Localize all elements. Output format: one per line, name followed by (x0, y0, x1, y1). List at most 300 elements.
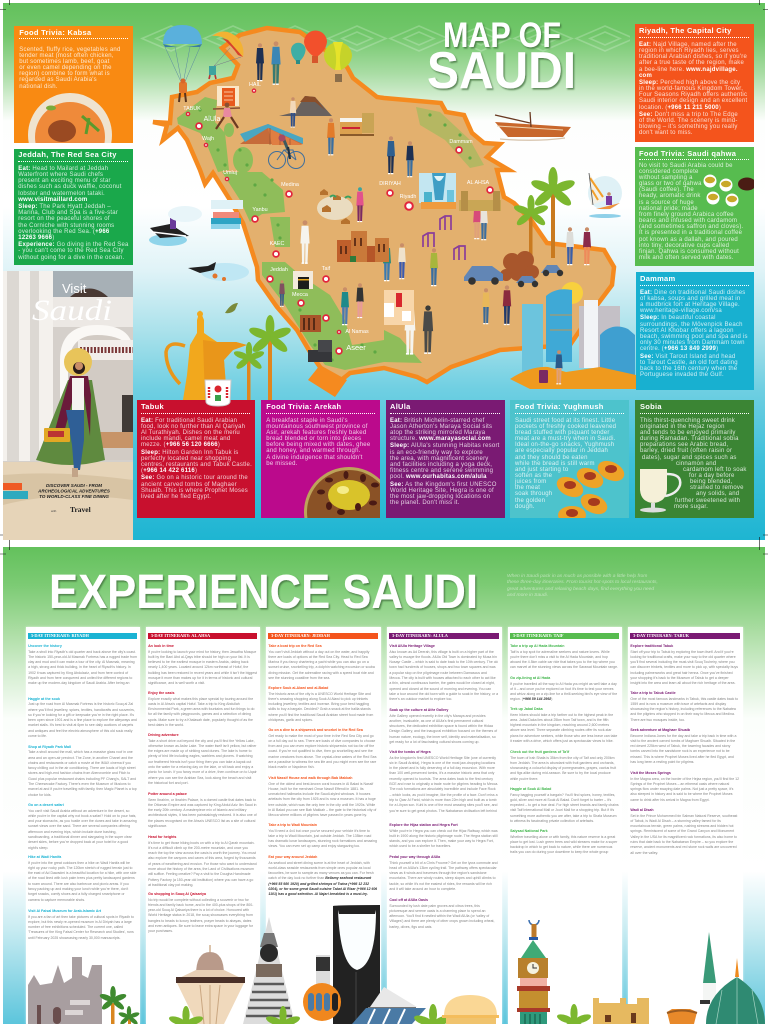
text: Tabuk tips: Eat: For traditional Saudi Arabian (141, 418, 237, 424)
text: Sobia description (640, 418, 747, 510)
bar: Taif (510, 633, 619, 639)
item: desert safari: Go on a desert safari (28, 803, 64, 807)
text: Kabsa description (19, 46, 120, 90)
icon: yoga woman (213, 103, 240, 129)
text: Riyadh tips: in the world-famous Kingdom Tower, (639, 86, 743, 92)
photo panel: Visit Saudi advert: Saudi (32, 294, 112, 327)
text: intro: these three-day itineraries. From tourist hot-spots to local restaurants, (507, 580, 658, 585)
column: Riyadh itinerary (26, 627, 140, 1024)
icon: Mud tower (300, 315, 321, 332)
text: Jeddah tips: Experience: Go diving in the Red Sea (18, 242, 129, 248)
text: qahwa description: beans and infused with cardamom (639, 218, 737, 224)
text: Arekah description: be missed. (266, 461, 298, 467)
icon: palms by the coast (233, 315, 292, 402)
item: trek: Trek up Jabal Daka (510, 707, 543, 711)
text: Riyadh tips: traditional Arabian dishes, so if you're (639, 54, 747, 60)
text: qahwa description: into tiny, decorative cups called (639, 243, 729, 249)
text: qahwa description: (Saudi coffee). The (639, 187, 694, 193)
text: Arekah description: Asir, arekah features freshly baked (266, 430, 366, 436)
text: Riyadh tips: Eat: Najd Village, named after the (639, 42, 737, 48)
item: Wadi mountain: Take a trip to Wadi Mountain (268, 823, 317, 827)
city labels: AlUla (204, 116, 220, 123)
text: Jeddah tips: lobster and watermelon tataki. (18, 191, 105, 197)
text: Riyadh tips: Four Seasons Riyadh offers authentic (639, 92, 747, 98)
heading: Tabuk: Tabuk (141, 402, 164, 411)
item: look: An look in time (148, 644, 174, 648)
bar: Tabuk: 3-DAY ITINERARY: TABUK (633, 633, 689, 638)
text: qahwa description: milk and often served with dates. (639, 255, 734, 261)
city labels: DIRIYAH (379, 181, 401, 187)
city labels: Medina (281, 182, 299, 188)
item: museum: If you are a fan of art then take pictures of cultural spots in Riyadh to explore, but this newly re-opened museum in Al Diriyah has a large number of free exhibitions scheduled. The current one, called 'Treasures of the King Faisal Center for Research and Studies', runs until February 2025 showcasing nearly 30,000 manuscripts. (28, 915, 134, 940)
text: Kabsa description: region) combine to form what is (19, 71, 110, 77)
item: Wadi mountain: You'll need a 4x4 but once you've secured your vehicle it's time to take a trip to Wadi Mountain, just outside Jeddah. The 135km road has dramatic lunar landscapes, stunning rock formations and amazing views. You can even set up camp and enjoy stargazing too. (268, 829, 377, 848)
text: Sobia description: more sugar. (674, 504, 708, 510)
heading: Yughmush: Food Trivia: Yughmush (515, 402, 604, 411)
text: AlUla tips: Jason Atherton's Maraya Social sits (390, 424, 492, 430)
text: Yughmush description: and they should be eaten (515, 455, 588, 461)
item: heights: It's time to get those hiking boots on with a trip to Al Qarah mountain. It's not a difficult climb up the 200-metre mountain, and once you reach the top the view across the oasis is worth the journey. You must also explore the canyons and caves of this area, forged by thousands of years of weathering and erosion. For those who want to understand more about the history of the area, the Land of Civilisations museum will suffice. Feeling creative? Pay a visit to the Dougha Handmade Pottery Factory (a 150-year old institution) where you can have a go at traditional clay pot making. (148, 841, 257, 887)
text: Riyadh tips: don't want to miss. (639, 130, 693, 136)
bar: Riyadh (28, 633, 137, 639)
text: qahwa description (639, 162, 743, 261)
text: Jeddah tips: without going for a dive in the ocean. (18, 255, 124, 261)
item: palace: Potter around a palace (148, 792, 187, 796)
text: Yughmush description: bread stuffed with piquant tender (515, 430, 610, 436)
item: oasis: Explore exactly what makes this place special by touring around the oasis in Al Ahsa's capital Hofuf. Take a trip to King Abdullah Environmental Park, a green area with fountains and fun things to do for all the family with playgrounds, games and a selection of dining spots. Make sure to try a Khalasah date, popularly thought of as the best dates in the world. (148, 697, 255, 727)
text: Yughmush description: soften as the (515, 473, 552, 479)
text: Dammam tips: Sleep: In beautiful coastal (640, 315, 716, 321)
text: Arekah description (266, 418, 370, 467)
item: Wadi Disah: Wadi al Disah (630, 808, 654, 812)
text: intro: and more in Saudi. (507, 593, 548, 598)
item: fruit gardens: The town of Irah Shafa is 35km from the city of Taif and only 200km from Jeddah. The area is abundant with fruit gardens and orchards, showcasing a colourful display of pomegranates, grapes, cactus fruit and figs alike during mid-season. Be sure to try the local produce while you're there. (510, 756, 616, 781)
text: Sobia description: preparations see Arabic bread, (640, 442, 728, 448)
item: adventure: Become Indiana Jones for the day and take a trip back in time with a visit to the ancient carved tombs of Maghaer Shuaib. Situated in the red desert 225km west of Tabuk, the towering facades and stony tombs carved into the sandstone rock is an experience not to be missed. This is where Prophet Moses lived after he fled Egypt, and has long been a resting point for pilgrims. (630, 734, 736, 764)
vegetation (177, 97, 484, 370)
text: Dammam tips: beach, swimming pool and spa and is (640, 334, 748, 340)
skyline: tent and stadium (352, 987, 453, 1024)
icon: shops (384, 290, 414, 325)
photo panel: Visit Saudi advert: Travel (70, 505, 91, 514)
item: traditional Tabuk: Explore traditional Tabuk (630, 644, 673, 648)
icon: red gate (217, 86, 239, 106)
text: Yughmush description: Saudi street food at its finest. Little (515, 418, 615, 424)
bar: AlUla: 3-DAY ITINERARY: ALULA (392, 633, 448, 638)
icon: coffee cups and dates (704, 174, 754, 206)
city labels: HAIL (249, 82, 261, 88)
icon: black fort (308, 340, 332, 362)
item: trek: Keen hikers should take a trip farther out to the highest peak in the area. Jabal Daka lies about 25km from Taif town, and is the fifth highest mountain in the kingdom, reaching around 2,600 metres above sea level. Three separate climbing routes offer its rock-star plans for adventure seekers, while those who are less brave can take it easier with a drive, which offers just as spectacular views to hike. (510, 713, 617, 743)
text: intro: When in Saudi pack in as much as possible with a little help from (507, 574, 647, 579)
photo panel: Visit Saudi advert: ARCHEOLOGICAL ADVENTURES (37, 488, 110, 494)
text: Yughmush description: the golden (515, 498, 545, 504)
text: qahwa description: heady, aromatic drink (639, 193, 701, 199)
text: Riyadh tips: a bee-line here. www.najdvillage. (639, 67, 738, 73)
item: Moses springs (630, 771, 739, 808)
text: AlUla tips: is an eco-friendly way to explore (390, 450, 483, 456)
skyline: green dome mosque (700, 932, 765, 1024)
text: intro (507, 574, 658, 598)
text: AlUla tips: structure. www.marayasocial.com (390, 436, 491, 442)
text: intro: great adventures and relaxing beach days, find everything you need (507, 587, 654, 592)
text: Kabsa description: national dish. (19, 84, 58, 90)
text: qahwa description: without sampling a (639, 175, 693, 181)
icon: rock formation (279, 96, 332, 116)
text: Sobia description: cardamom left to soak (683, 467, 747, 473)
photo panel: Visit Saudi advert: DISCOVER SAUDI - FROM (46, 483, 102, 488)
item: mall: Take a stroll around the mall, which has a massive glass roof in one area and an open-air precinct. The Zone, in another Chanel and the chains and restaurants or catch a movie at the IMAX cinema if you fancy chilling out in the air conditioning. There are loads of high street stores and high-end fashion chains from Abercrombie and Fitch to Gucci plus popular restaurant chains including PF Chang's, SALT and The Cheesecake Factory. There's even the Museum of Illusions to marvel at and if you're travelling with family, then Magic Planet is a top choice for kids. (28, 750, 137, 797)
city labels: Wajh (202, 136, 214, 142)
text: qahwa description: No visit to Saudi Arabia could be (639, 163, 733, 169)
text: Jeddah tips: the Corniche with stunning rooms (18, 223, 114, 229)
item: mall: Shop at Riyadh Park Mall (28, 745, 71, 749)
text: AlUla tips: See: As the Kingdom's first UNESCO (390, 482, 497, 488)
text: AlUla tips: the area, with magnificent scenery (390, 456, 489, 462)
text: Tabuk tips: mezze. (+966 56 120 6666) (141, 442, 220, 448)
text: Jeddah tips: Marina, Club and Spa is a five-star (18, 210, 118, 216)
panel: Riyadh (635, 24, 754, 142)
text: Dammam tips: surroundings, the Mövenpick Beach (640, 322, 743, 328)
text: AlUla tips: Sleep: AlUla's stunning Habitas resort (390, 443, 500, 449)
city labels: Al Namas (345, 329, 369, 335)
item: shopping: No trip would be complete without collecting a souvenir or two for friends and family back home, and in the 400-plus shops of the 800-year-old Souq Al Qaisariya there is a lot of choice. Honoured with World Heritage status in 2018, the souq showcases everything from bangles to beads to luxury leathers, prayer beads to abayas, dates and even antiques. Be sure to leave extra space in your luggage for your purchases. (148, 898, 253, 933)
text: Tabuk tips (141, 418, 252, 500)
bar: Al Ahsa (148, 633, 257, 639)
photo panel: Visit Saudi advert (3, 271, 133, 540)
item: zip lining: Go zip-lining at Al Hada (510, 676, 550, 680)
text: Dammam tips: only 30 minutes from Dammam town (640, 340, 745, 346)
text: AlUla tips: pool. www.ourhabitas.com/alula (390, 474, 487, 480)
icon: Dammam skyline and dunes (510, 282, 636, 389)
text: Dammam tips: Eat: Dine on traditional Saudi dishes (640, 290, 746, 296)
panel: Tabuk (137, 400, 255, 518)
text: Dammam tips: See: Visit Tarout Island and head (640, 354, 735, 360)
icons: off-road vehicles (464, 265, 563, 287)
item: boat: You can't visit Jeddah without a day out on the water, and happily there are loads of options at the Red Sea City. Head to Red Sea Marina if you fancy chartering a yacht while you can also go on a sunset cruise, snorkelling trip, a dolphin watching excursion or scuba diving mission. Get the adrenaline racing with a speed boat ride and see the stunning coastline from the sea. (268, 650, 375, 680)
item: castle: One of the most famous landmarks in Tabuk, this castle dates back to 1559 and is now a museum with trace of artefacts and display showcasing the region's history, including references to the Nabatea and the pilgrims who stopped in on their way to Mecca and Medina. There are two mosques inside, too. (630, 697, 738, 722)
text: Arekah description: A divine indulgence that shouldn't (266, 455, 363, 461)
text: Tabuk tips: Al Turathiyah. Dishes on the menu (141, 430, 240, 436)
item: desert safari: You can't visit Saudi Arabia without an adventure in the desert, so while you're in the capital why not book a safari? Hold on to your hats, and your stomachs, as you hustle over the dunes and take in amazing sunset views over the sand. There are several companies offering afternoon and evening trips, which include dune bashing, sandboarding, a traditional dinner and stargazing in the super clear desert skies, before you're dropped back at your hotel for a good night's sleep. (28, 809, 137, 850)
icon: east coast palms (513, 167, 576, 260)
item: souk: Haggle at Souk Al Balad (510, 787, 551, 791)
item: zip lining: If you've travelled all the way to Al Hada you might as well take a day of it – and once you've explored on foot it's time to test your nerves and whizz along on a zip-line for a thrill-seeking bird's eye view of the region. (+966 59 144 2992) (510, 682, 617, 701)
icons: purple camels (423, 216, 465, 260)
text: Yughmush description (514, 418, 616, 510)
icons: travellers on the map (256, 41, 591, 355)
text: AlUla tips (390, 418, 500, 506)
text: Tabuk tips: include mandi, camel meat and (141, 436, 230, 442)
item: eat: As seafood and street dining scene is at the heart of Jeddah, with world-class seaside restaurants from simple ones popular as local favourites, be sure to sample as many venues as you can. For fresh catch of the day look no further than Bellamy seafood restaurant (+966 55 980 1920) and grilled shrimps of Twina (+966 12 232 0204), or for some great Saudi cuisine Tabat Al Rizar (+966 12 606 1101) has a good selection. Al Najari breakfast is a must-try. (268, 861, 377, 896)
text: Dammam tips (640, 290, 748, 378)
item: castle: Take a trip to Tabuk Castle (630, 691, 676, 695)
text: Yughmush description: juices from (515, 479, 546, 485)
text: Sobia description: barley, dried fruit (often raisin or (640, 448, 732, 454)
text: Riyadh tips: blowing – it's something you really (639, 124, 738, 130)
item: Al Hada: Take a trip up Al Hada Mountain (510, 644, 564, 648)
item: Nassif: Visit Nassif House and walk through Bab Makkah (268, 776, 352, 780)
item: traditional Tabuk: Start off your trip to Tabuk by exploring the town itself. And if you're looking for traditional crafts, make your way to the old quarter where you'll find several including the must-visit Souq Touheiry, where you can discover trinkets, textiles and more to pick up, with specialty buys including palmerworks and great hair henna. Once you've finished your shopping it's back to the Museum of Tabuk to get a deeper insight into the area and learn all about the rich heritage of the area. (630, 650, 738, 685)
text: Tabuk tips: Shuaib. This is where Prophet Moses (141, 488, 248, 494)
column: Tabuk itinerary (628, 627, 742, 1024)
text: Tabuk tips: See: Go on a historic tour around the (141, 475, 248, 481)
title: Map of Saudi: SAUDI (427, 42, 576, 100)
city labels: Mecca (292, 292, 308, 298)
text: Yughmush description: the meat (515, 485, 540, 491)
icon: Riyadh towers (419, 173, 456, 209)
icon: Al Ahsa fort (459, 191, 501, 211)
item: cycling: Pedal your way through AlUla (389, 855, 440, 859)
item: cycling: Think yourself a bit of a Chris Froome? Get on the lycra commute and head off on AlUla's 13km cycling trail. The pathway offers spectacular views as it winds and traverses through the region's sandstone mountains. There are windy routes, steep slopes and uphill climbs to tackle, so while it's not the easiest of rides, the rewards will be rich and it will take around an hour to complete. (389, 861, 498, 891)
item: eat: Eat your way around Jeddah (268, 855, 317, 859)
text: Arekah description: mountainous southwest province of (266, 424, 368, 430)
text: Dammam tips: Resort Al Khobar offers a lagoon (640, 328, 734, 334)
column: Jeddah itinerary (266, 627, 380, 1024)
heading: Kabsa: Food Trivia: Kabsa (19, 28, 91, 37)
icon: hot air balloons (291, 30, 352, 82)
icon: dallah coffee pot (166, 310, 247, 400)
photo panel: Visit Saudi advert: TO WORLD-CLASS FINE DINING (39, 494, 109, 499)
text: Yughmush description: dough. (515, 504, 535, 510)
text: Sobia description: and tends to be enjoyed primarily (640, 430, 736, 436)
icon: paraglider (209, 31, 243, 79)
text: Yughmush description: pockets of freshly cooked leavened (515, 424, 616, 430)
text: Jeddah tips: www.visitmaillard.com (18, 197, 87, 203)
text: Tabuk tips: lived after he fled Egypt. (141, 494, 211, 500)
item: Athr gallery: Athr Gallery opened recently in the city's Maraya and provides another, invaluable, as one of AlUla's first permanent cultural structures, the dedicated exhibition space is found within the Hidaa Design Gallery, and the inaugural exhibition focused on the themes of human nature, ecology, the inner self, identity and materialisation, so get ready for a lot of fascinating cultural shows coming up. (389, 714, 497, 744)
icon: dhow ship (495, 112, 571, 140)
column: Al Ahsa itinerary (146, 627, 260, 1024)
text: Riyadh tips: location. (+966 11 211 5000) (639, 105, 721, 111)
text: Jeddah tips (18, 166, 129, 261)
text: Sobia description: further sweetened with (675, 498, 740, 504)
heading: Riyadh: Riyadh, The Capital City (639, 26, 732, 35)
text: AlUla tips: World Heritage Site, Hegra is one of (390, 488, 494, 494)
icon: fish (225, 303, 238, 313)
city labels: Umluj (223, 170, 237, 176)
city labels: KAEC (270, 241, 284, 247)
text: Sobia description: for a day before (689, 473, 735, 479)
text: Dammam tips: Portuguese invaded the Gulf. (640, 372, 724, 378)
item: hike: If you're into the great outdoors then a hike on Wadi Hanifa will be right up your rocky path. The 120km stretch of rugged terrain just to the east of Ad Dawadmi is a beautiful location for a hike, with one side of the road lined with lush palm trees plus pretty landscaped gardens to roam around. There are also barbecue and picnic areas. If you fancy packing up and making your lunch while you're there, don't forget snacks, comfy shoes and a fully charged smartphone or camera to capture memorable shots. (28, 861, 136, 902)
icon: market stall (340, 113, 374, 135)
text: Sobia description: during Ramadan. Traditional sobia (640, 436, 739, 442)
item: Moses springs: Visit the Moses Springs (630, 771, 671, 775)
text: Tabuk tips: centres, restaurants and Tabuk Castle. (141, 462, 252, 468)
text: Sobia description: any solids, and (696, 491, 739, 497)
heading: qahwa: Food Trivia: Saudi qahwa (639, 149, 736, 158)
item: dive: Go on a dive to a shipwreck and snorkel in the Red Sea (268, 728, 363, 732)
bar: Al Ahsa: 3-DAY ITINERARY: AL AHSA (151, 633, 210, 638)
text: Kabsa description: but sometimes lamb, beef, goat (19, 59, 110, 65)
text: Kabsa description: or even camel depending on the (19, 65, 112, 71)
item: Wadi Disah: Set in the Prince Mohammed bin Salman Natural Reserve, southeast of Tabuk, is Wadi Al Disah – a stunning valley famed for its mountainous terrain, green palms, rushing streams and hidden hot springs. Reminiscent of some of the Grand Canyon and Monument Valley in the USA for its magnificent rock formations, its also home to ruins that date back to the Nabataean Empire – so you explore the reserve, ancient monuments and red stone rock walls are uncovered all over the valley. (630, 814, 737, 855)
heading: Arekah: Food Trivia: Arekah (266, 402, 341, 411)
text: Kabsa description: Scented, fluffy rice, vegetables and (19, 47, 120, 53)
text: Dammam tips: to Tarout Castle, an old fort dating (640, 360, 738, 366)
text: Tabuk tips: ancient carved tombs of Maghaer (141, 482, 237, 488)
panel: Food Trivia Kabsa (14, 26, 133, 143)
bar: Jeddah (268, 633, 378, 639)
text: Arekah description: bread blended or torn into pieces (266, 436, 361, 442)
text: Kabsa description: regarded as Saudi Arabia's (19, 77, 97, 83)
city labels: Jeddah (270, 267, 288, 273)
photo panel: Visit Saudi advert: Visit (62, 281, 87, 296)
item: museum: Visit Al Faisal Museum for Arab-Islamic Art (28, 909, 101, 913)
text: Jeddah tips: 12263 9666) (18, 235, 54, 241)
text: Riyadh tips: region in which Riyadh lies, serves (639, 48, 739, 54)
text: Yughmush description: and just starting to (515, 467, 568, 473)
text: Riyadh tips: of the World. The scenery is mind- (639, 118, 738, 124)
text: Kabsa description: tender meat (most often chicken, (19, 53, 114, 59)
item: oasis: Cool off at AlUla Oasis (389, 898, 428, 902)
text: Sobia description: being blended, (690, 479, 732, 485)
item: Al Hada: Taif is a top spot for adrenaline seekers and nature lovers. While you're there don't miss a visit to the Al Hada Mountain, and hop aboard the 4.5km cable car ride that takes you to the top where you can marvel at the stunning views across the Sarawat Mountain range. (510, 650, 618, 669)
text: Yughmush description: soak through (515, 491, 552, 497)
text: Dammam tips: a mudbrick fort at Heritage Village. (640, 302, 740, 308)
photo panel: Visit Saudi advert: with (51, 509, 57, 513)
icon: windsurfer (588, 173, 622, 218)
text: Jeddah tips: resort on the peaceful shores of (18, 216, 110, 222)
text: Sobia description: cinnamon and (676, 461, 716, 467)
item: Nassif: One of the oldest and best-known coral houses in Al Balad is Nassif House, built for the merchant Omar Nassif Effendi in 1881. Its unmatched hallmarks include the Saudi-styled windows. It houses artefacts from the city from 1925 and is now a museum. It has a huge tree outside, which was the only tree in the city until the 1920s. While in Al Balad you can see Bab Makkah – the gate to the historical city of Mecca where millions of pilgrims have passed in years gone by. (268, 782, 376, 817)
heading: Dammam: Dammam (640, 274, 675, 283)
heading: AlUla: AlUla (390, 402, 411, 411)
panel: Dammam (636, 272, 754, 390)
column: AlUla itinerary (387, 627, 502, 1024)
item: heritage village: Visit AlUla Heritage Village (389, 644, 435, 648)
panel: Food Trivia Saudi qahwa (635, 147, 754, 266)
text: Riyadh tips: Saudi interior design and an excellent (639, 98, 747, 104)
heading: Sobia: Sobia (640, 402, 662, 411)
item: souk: Explore Souk al-Alawi and al-Balad (268, 686, 328, 690)
item: shopping: Go shopping in Souq Al Qaisariya (148, 892, 206, 896)
icon: glass of sobia (640, 469, 682, 512)
icon: plate of kabsa (28, 93, 112, 143)
city labels (183, 82, 490, 352)
title: Map of Saudi: MAP OF (443, 16, 561, 55)
icon: scuba diver (188, 262, 249, 281)
skyline: fort with palms (28, 957, 140, 1024)
text: AlUla tips: and facilities including a yoga deck, (390, 462, 492, 468)
text: Riyadh tips: after a true taste of the region, make (639, 60, 744, 66)
icon: decorated coffee cup (204, 380, 232, 406)
text: qahwa description: (and sometimes saffron and cloves). (639, 224, 743, 230)
text: AlUla tips: atop the striking mirrored Maraya (390, 430, 485, 436)
text: Sobia description: dates), sugar and spices such as (642, 455, 737, 461)
bar: Riyadh: 3-DAY ITINERARY: RIYADH (31, 633, 89, 638)
text: Dammam tips: www.heritage-village.com/sa (640, 308, 722, 314)
item: Hijaz station: While you're in Hegra you can check out the Hijaz Railway, which was built in 1900 along the historic pilgrimage route. The Hegra station still stands, and you can explore it. Then, make your way to Hegra Fort, which used to be a shelter for travellers. (389, 829, 498, 848)
text: Tabuk tips: food, look no further than Al Qariyah (141, 424, 245, 430)
bar: Jeddah: 3-DAY ITINERARY: JEDDAH (271, 633, 330, 638)
skyline: sandstone dome (442, 995, 499, 1024)
text: Dammam tips: of kabsa, soups and grilled meat in (640, 296, 740, 302)
map of Saudi Arabia (153, 28, 614, 397)
item: Hegra: Visit the tombs of Hegra (389, 750, 431, 754)
text: Yughmush description: Ideal on-the-go snacks, Yughmush (515, 442, 614, 448)
icon: oasis huts (317, 189, 353, 224)
city labels: Yanbu (252, 207, 268, 213)
icon: cyclist (268, 134, 304, 168)
text: Yughmush description: while the bread is still warm (515, 461, 595, 467)
city labels: TABUK (183, 106, 201, 112)
item: souk: Fancy bagging yourself a bargain? You'll find spices, honey, textiles, gold, silver and more at Souk Al Balad. Don't forget to barter – it's expected – to get a true deal. For high street brands and family chains visit Taif International Mall or Jouri Mall for a shopping trip. But if it's something more authentic you are after, take a trip to Shafa Museum to witness its fascinating private collection of artefacts. (510, 793, 619, 823)
text: Arekah description: and honey, and warmed through. (266, 448, 361, 454)
item: look: If you're looking to launch your mind for history, then Jawatha Mosque built by the Bani Abd al-Qays tribe should be high on your list. It is believed to be the earliest mosque in eastern Arabia, dating back nearly 1,400 years. Located around 12km northeast of Hofuf, the building has been restored in recent years and while it isn't the biggest mosque it more than makes up for it in terms of historic and cultural significance, and is well worth a visit. (148, 650, 257, 685)
item: Hijaz station: Explore the Hijaz station and Hegra Fort (389, 823, 458, 827)
column: Taif itinerary (508, 627, 622, 1024)
item: souk: The historic area of the city is a UNESCO World Heritage Site and there's amazing shopping along Souk Al Alawi to pick up trinkets including jewellery, textiles and incense. Bring your best haggling skills to buy a bargain. Decided? Grab a snack at the balila stands where you'll find the traditional Saudi Arabian street food made from chickpeas, garlic and spices. (268, 692, 373, 722)
item: heights: Head for heights (148, 835, 176, 839)
city markers (186, 89, 493, 354)
skyline: desert fort (593, 998, 649, 1024)
item: palace: Seen Ibrahim, or Ibrahim Palace, is a domed castle that dates back to the Ottoman Empire and was captured by King Abdul Aziz Ibn Saud in the early 20th century. A masterpiece mix of Islamic and military architectural styles, it has been painstakingly restored. It is also one of the places recognised on the Ahsa's UNESCO list as a site of cultural significance. (148, 798, 257, 828)
text: Yughmush description: are especially popular in Jeddah (515, 448, 608, 454)
city labels: Dammam (449, 139, 473, 145)
icon: arekah dish (304, 467, 380, 518)
text: Riyadh tips: See: Don't miss a trip to The Edge (639, 112, 738, 118)
text: AlUla tips: Eat: British Michelin-starred chef (390, 418, 485, 424)
panel: Food Trivia Arekah (261, 400, 380, 518)
icon: cruise boat (211, 200, 243, 229)
icon: yughmush pastries (556, 460, 624, 518)
panel: Food Trivia Yughmush (510, 400, 629, 518)
text: Arekah description: before being mixed with dates, ghee (266, 442, 370, 448)
text: Sobia description: strained to remove (690, 485, 744, 491)
text: Jeddah tips: present an exciting menu of star (18, 178, 111, 184)
item: national park: Saiysad National Park (510, 829, 548, 833)
item: oasis: Surrounded by lush date palm groves and citrus trees, this picturesque and serene oasis is a charming place to spend an afternoon. You'll find it nestled within the Wadi AlUla (or 'valley of Villages') and there are plenty of other crops grown including wheat, barley, olives, figs and oats. (389, 904, 494, 929)
item: heritage village: Also known as Ad Deerah, this village is built on a higher part of the valley to escape the floods. AlUla Old Town is dominated by Musa bin Nusayr Castle – which is said to date back to the 10th century. The old town had hundreds of houses, shops and two town squares and was a popular stop on the pilgrimage route between Damascus and Mecca. The city is built with houses attached to each other to act like a thin, almost continuous barrier, the gates would be closed at night, opened and closed at the sound of morning and evening. You can take a tour around the old town with a guide to soak in the history, or a there's an outdoor market to explore too. (389, 650, 498, 701)
city labels: Taif (322, 266, 331, 272)
skyline: Kingdom Centre tower (303, 905, 380, 1024)
panel: AlUla (386, 400, 505, 518)
text: Jeddah tips: Waterfront where Saudi chefs (18, 172, 103, 178)
text: Jeddah tips: - you can't come to the Red Sea City (18, 248, 124, 254)
item: driving: Driving adventure (148, 733, 179, 737)
text: qahwa description: glass or two of qahwa (639, 181, 702, 187)
icon: mud brick buildings (337, 231, 389, 262)
bar: Tabuk (630, 633, 740, 639)
heading: Jeddah: Jeddah, The Red Sea City (18, 150, 117, 159)
text: Dammam tips: centre. (+966 13 849 2999) (640, 346, 718, 352)
item: souk: Just up the road from Al Masmak Fortress is the historic Souq al Zal where you'll find jewellery, spices, textiles, handicrafts and souvenirs, so if you're looking for a gift or keepsake you're in the right place. It's been open since 1901 and is a fine place to explore the alleyways and market stalls. It's best to visit at 6pm to see daily auctions of carpets and antiques and feel the electric atmosphere of this old souk really come to life. (28, 702, 137, 738)
skyline: clock tower (517, 920, 592, 1024)
text: Arekah description: A breakfast staple in Saudi's (266, 418, 348, 424)
skyline: water tower (168, 945, 245, 1024)
panel: Sobia (635, 400, 754, 518)
text: Tabuk tips: (+966 14 422 6116) (141, 468, 197, 474)
item: castle (630, 691, 739, 728)
text: Jeddah tips: dishes such as duck waffle, coconut (18, 184, 122, 190)
item: souk: Haggle at the souk (28, 697, 60, 701)
icon: jet ski (149, 206, 202, 246)
text: Sobia description: originated in the Hejaz region (640, 424, 725, 430)
text: Jeddah tips: Sleep: The Park Hyatt Jeddah – (18, 204, 111, 210)
text: qahwa description: is a source of huge (639, 200, 694, 206)
item: Athr gallery: Soak up the culture at Athr Gallery (389, 708, 448, 712)
text: qahwa description: from finely ground Arabica coffee (639, 212, 734, 218)
bar: AlUla (389, 633, 498, 639)
text: Tabuk tips: perfectly located near shopping (141, 456, 231, 462)
text: AlUla tips: fitness centre and serene swimming (390, 468, 493, 474)
text: qahwa description: national pride; made (639, 206, 698, 212)
item: boat: Take a boat trip on the Red Sea (268, 644, 322, 648)
item: fruit gardens: Check out the fruit gardens of Ta'if (510, 750, 569, 754)
icon: Kaaba (293, 271, 313, 289)
